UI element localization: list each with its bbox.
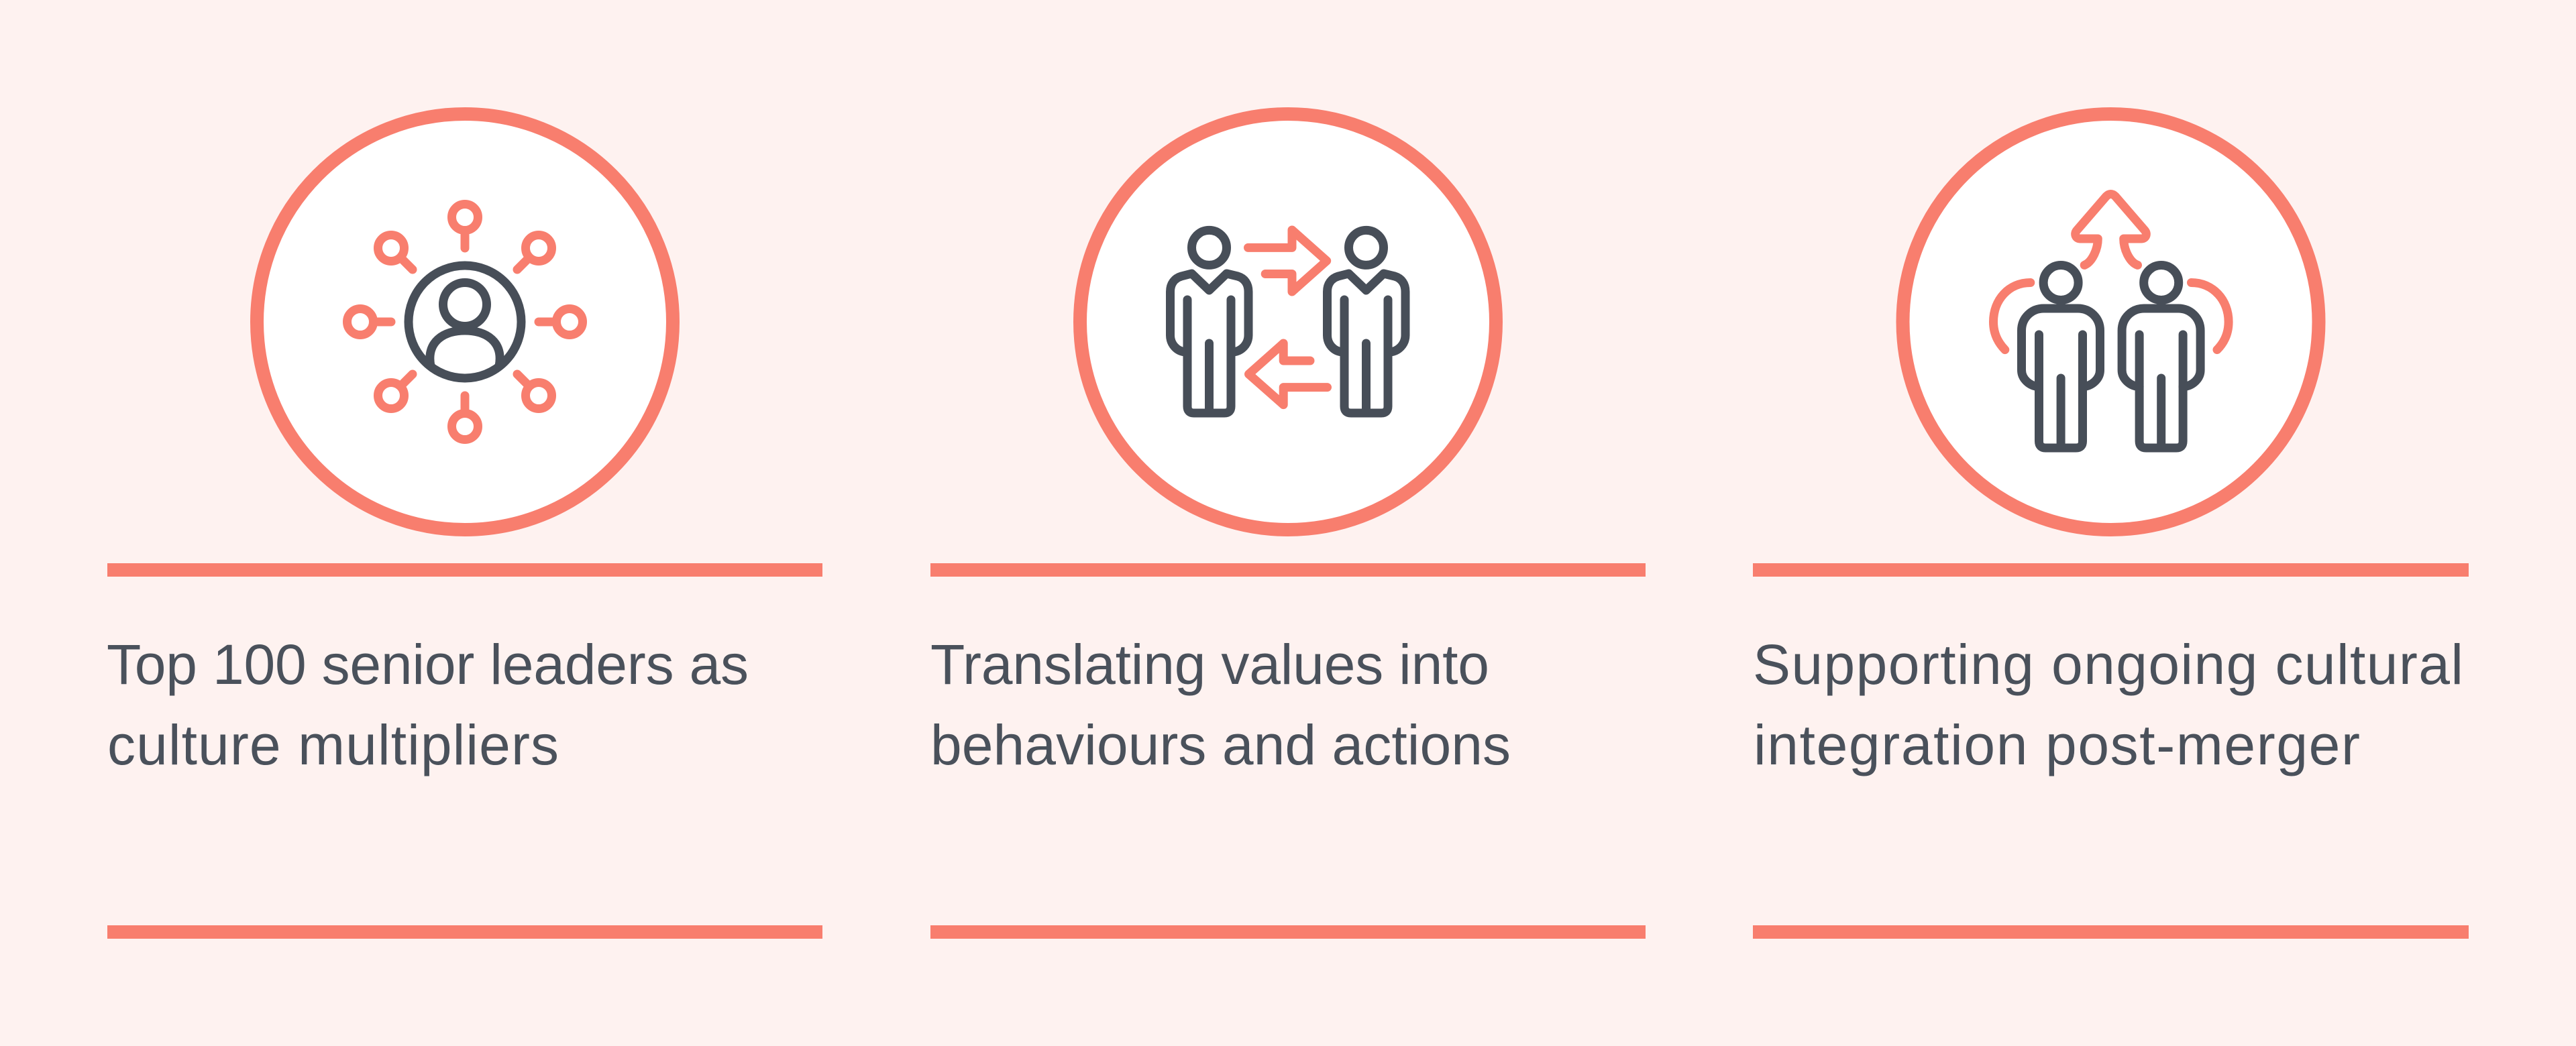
- caption: integration post-merger: [1754, 713, 2360, 776]
- arrow: left: [1249, 343, 1327, 405]
- caption: behaviours and actions: [930, 713, 1511, 776]
- panel: translating values: [930, 114, 1646, 939]
- swirl: left: [1994, 283, 2031, 350]
- icon ring: [257, 114, 673, 530]
- top divider: [1753, 563, 2469, 577]
- right person: [1327, 230, 1405, 413]
- icon ring: [1902, 114, 2318, 530]
- caption: Top 100 senior leaders as: [107, 633, 749, 696]
- icon ring: [1080, 114, 1496, 530]
- panel: senior leaders: [107, 114, 822, 939]
- swirl: right: [2191, 283, 2229, 350]
- left person: [1170, 230, 1248, 413]
- icon: leader network: [257, 114, 673, 530]
- bottom divider: [1753, 925, 2469, 939]
- right person: [2122, 266, 2200, 448]
- left person: [2022, 266, 2100, 448]
- icon: two people with upward arrow: [1902, 114, 2318, 530]
- arrow: right: [1248, 230, 1327, 292]
- caption: Supporting ongoing cultural: [1753, 633, 2463, 696]
- panel: cultural integration: [1753, 114, 2469, 939]
- caption: culture multipliers: [107, 713, 559, 776]
- arrow: up: [2076, 194, 2146, 265]
- top divider: [930, 563, 1646, 577]
- caption: Translating values into: [930, 633, 1489, 696]
- bottom divider: [107, 925, 822, 939]
- surrounding nodes: [347, 204, 582, 440]
- top divider: [107, 563, 822, 577]
- icon: two people exchanging: [1080, 114, 1496, 530]
- central person in circle: [409, 266, 521, 378]
- bottom divider: [930, 925, 1646, 939]
